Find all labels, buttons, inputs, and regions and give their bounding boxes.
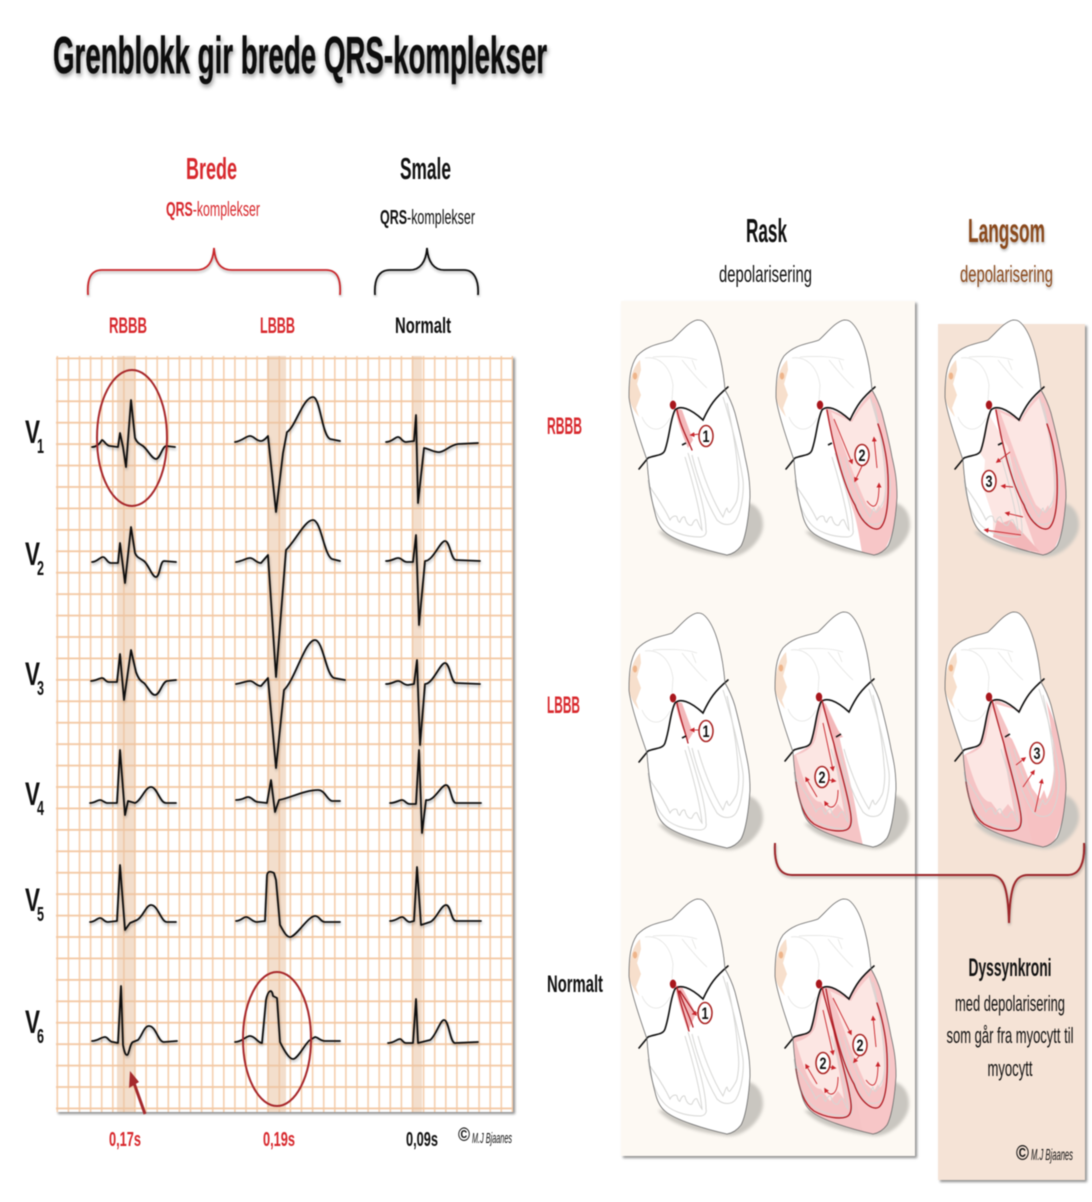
lead labels V1-V6: 3 — [37, 678, 44, 700]
heart: normal fast step 1: 1 — [702, 1004, 708, 1023]
heading: Rask depolarisering — [719, 212, 812, 287]
duration: 0,17s: 0,17s — [109, 1129, 141, 1151]
lead labels V1-V6: V — [25, 776, 40, 812]
lead labels V1-V6: V — [25, 656, 40, 692]
highlight ellipse: RBBB V1 — [97, 370, 167, 506]
lead labels V1-V6: 2 — [37, 558, 44, 580]
heading: Rask depolarisering: depolarisering — [719, 261, 812, 287]
heading: Brede QRS-komplekser: QRS-komplekser — [166, 199, 260, 221]
duration: 0,19s: 0,19s — [263, 1129, 295, 1151]
heart: normal fast step 2: 2 — [820, 1054, 826, 1073]
ECG traces: LBBB — [235, 397, 345, 1059]
lead labels V1-V6: V — [25, 414, 40, 450]
lead labels V1-V6: V — [25, 536, 40, 572]
copyright signature: heart panel: © — [1016, 1142, 1029, 1165]
heart: normal fast step 2 — [775, 899, 909, 1139]
brace: dyssynchrony — [775, 843, 1084, 923]
copyright signature: heart panel — [1016, 1142, 1073, 1165]
lead labels V1-V6: 6 — [37, 1026, 44, 1048]
duration: 0,09s: 0,09s — [406, 1129, 438, 1151]
heart: LBBB slow step 3: 3 — [1034, 744, 1040, 763]
heart: LBBB fast step 2: 2 — [818, 768, 826, 787]
text: LBBB — [547, 692, 580, 719]
lead labels V1-V6: V — [25, 882, 40, 918]
heading: Smale QRS-komplekser: QRS-komplekser — [380, 207, 475, 229]
lead labels V1-V6: 1 — [37, 436, 44, 458]
column label: Normalt: Normalt — [395, 313, 451, 338]
brace: narrow QRS — [375, 248, 478, 295]
heart: normal fast step 1 — [629, 899, 763, 1136]
heart: LBBB slow step 3 — [945, 612, 1079, 850]
heart: RBBB fast step 2: 2 — [858, 446, 866, 465]
panel: ECG paper grid — [56, 356, 513, 1112]
heart: LBBB fast step 1 — [629, 613, 763, 850]
copyright signature: ECG panel — [458, 1125, 512, 1147]
heading: Smale QRS-komplekser: Smale — [400, 151, 451, 186]
callout: Dyssynkroni text: myocytt — [988, 1056, 1032, 1081]
title: Grenblokk gir brede QRS-komplekser — [53, 27, 547, 85]
brace: wide QRS — [88, 248, 340, 295]
heart: normal fast step 2: 2 — [856, 1036, 864, 1055]
lead labels V1-V6: V — [25, 1004, 40, 1040]
heart: RBBB fast step 2 — [776, 320, 910, 558]
QRS duration band: LBBB — [267, 356, 286, 1112]
column label: LBBB: LBBB — [260, 313, 295, 338]
heading: Smale QRS-komplekser — [380, 151, 475, 229]
heart: LBBB fast step 2 — [775, 612, 909, 850]
callout: Dyssynkroni text — [946, 954, 1074, 1081]
heading: Brede QRS-komplekser: Brede — [186, 151, 237, 186]
lead labels V1-V6: 4 — [37, 798, 45, 820]
row label: RBBB: RBBB — [547, 413, 582, 440]
QRS duration band: RBBB — [117, 356, 135, 1112]
copyright signature: ECG panel: © — [458, 1125, 470, 1146]
heart: LBBB fast step 1: 1 — [702, 722, 710, 741]
ECG traces: normal — [386, 415, 481, 1043]
heading: Rask depolarisering: Rask — [746, 212, 787, 249]
heart: RBBB fast step 1: 1 — [702, 427, 710, 446]
QRS duration band: normal — [412, 356, 422, 1112]
arrow: RBBB V6 S wave — [129, 1071, 145, 1114]
panel: Rask depolarisering background — [621, 301, 915, 1156]
ECG traces: RBBB — [90, 400, 177, 1055]
panel: Langsom depolarisering background — [938, 324, 1085, 1180]
heading: Brede QRS-komplekser — [166, 151, 260, 221]
lead labels V1-V6: 5 — [37, 904, 44, 926]
highlight ellipse: LBBB V6 — [243, 972, 311, 1106]
row label: Normalt: Normalt — [547, 971, 603, 998]
heart: RBBB slow step 3: 3 — [986, 472, 992, 491]
heart: RBBB fast step 1 — [629, 320, 763, 557]
heart: RBBB slow step 3 — [945, 320, 1079, 558]
text: M.J Bjaanes — [472, 1130, 512, 1147]
column label: RBBB: RBBB — [109, 313, 147, 338]
heading: Langsom depolarisering — [960, 212, 1053, 287]
lead labels V1-V6 — [25, 414, 45, 1048]
